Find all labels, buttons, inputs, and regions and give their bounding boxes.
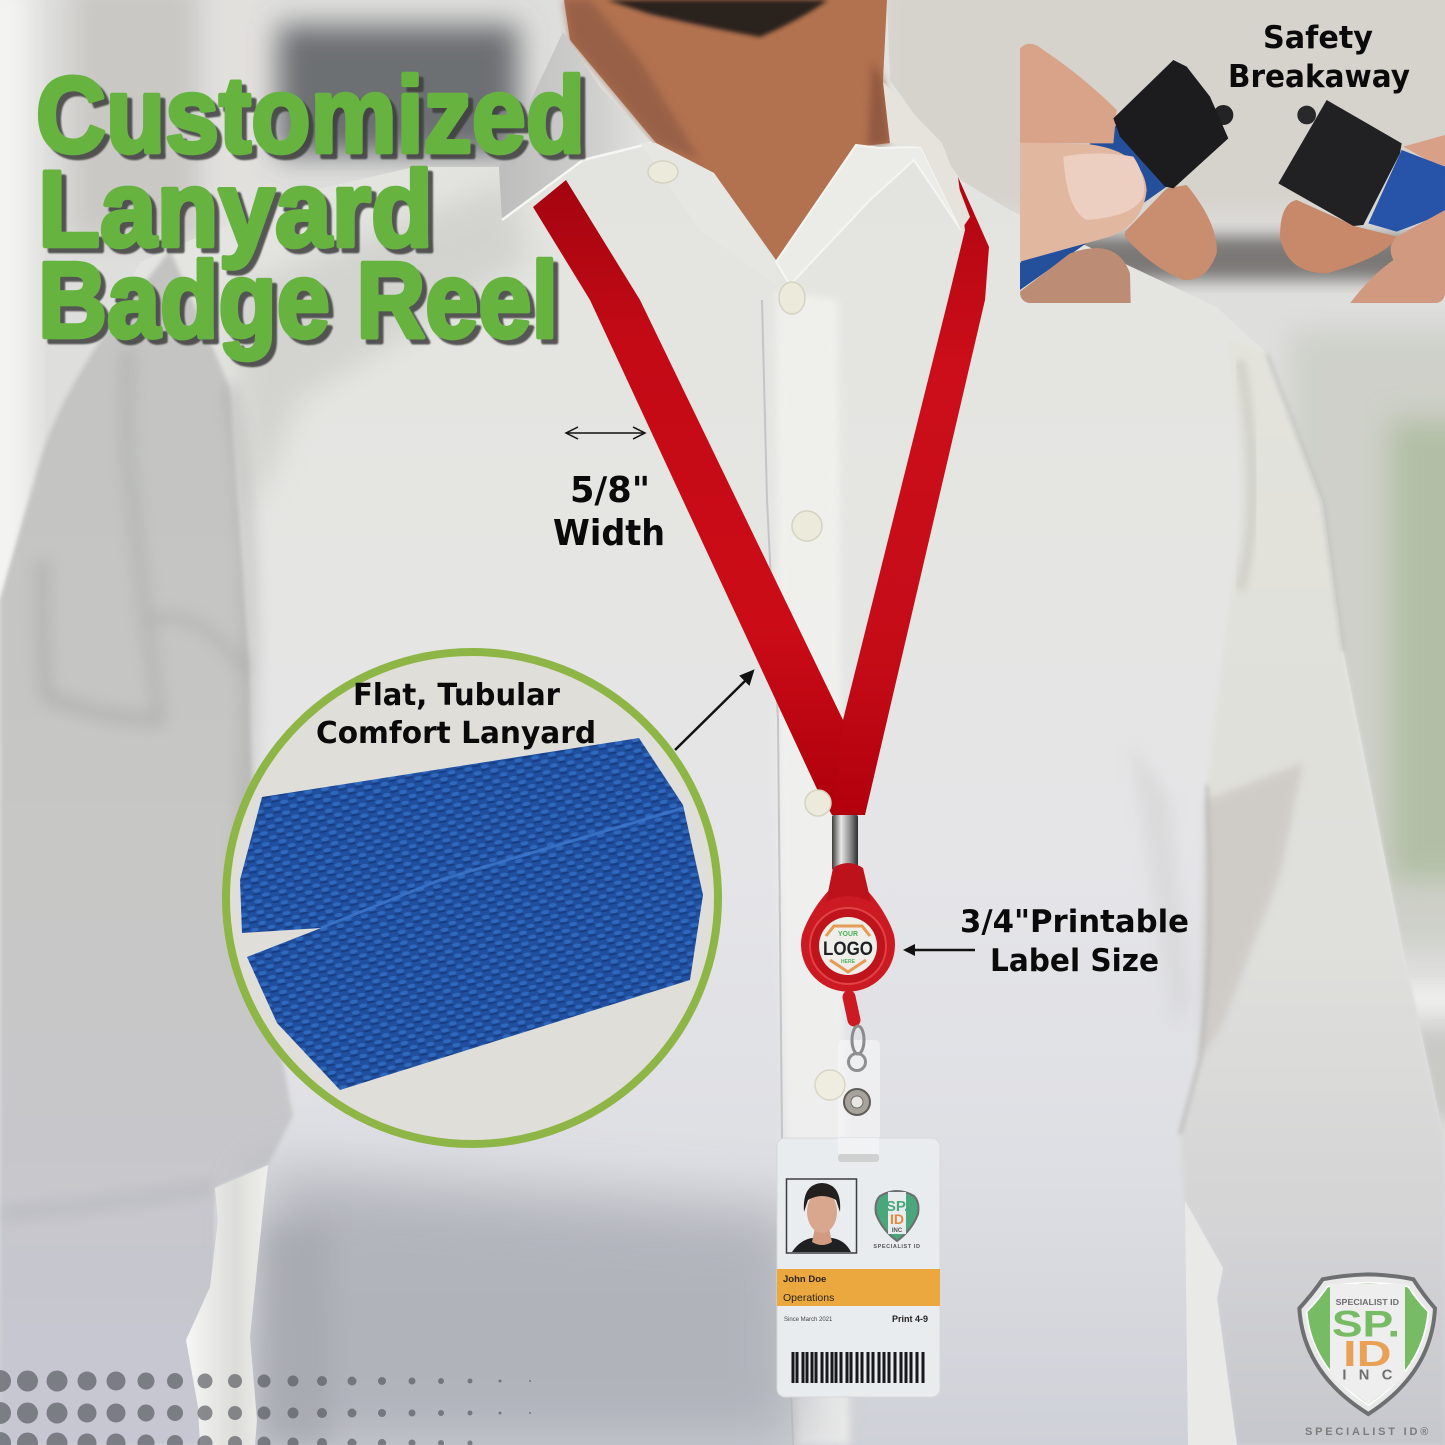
blue fabric <box>240 738 703 1090</box>
printable label size caption: 3/4"Printable <box>960 904 1189 940</box>
placket <box>776 290 850 1445</box>
your logo label: LOGO <box>823 939 873 960</box>
id badge card: Print 4-9 <box>892 1314 928 1324</box>
arrow: circle to lanyard <box>675 671 753 750</box>
printable label size caption <box>960 904 1189 979</box>
your logo label: YOUR <box>838 931 858 938</box>
id badge card: Since March 2021 <box>784 1317 833 1323</box>
printable label size caption: Label Size <box>990 943 1159 979</box>
neck <box>564 0 890 260</box>
metal connector tube <box>832 815 858 870</box>
left arm and body gap <box>186 1165 268 1445</box>
shoulder shade <box>230 180 530 520</box>
safety breakaway label: Breakaway <box>1228 59 1410 95</box>
shirt buttons <box>648 161 831 816</box>
your logo label <box>823 926 873 972</box>
circle label: Flat, Tubular <box>353 678 560 713</box>
width label: Width <box>553 513 665 554</box>
beard <box>607 0 828 37</box>
specialist id shield logo: SPECIALIST ID <box>1336 1297 1399 1307</box>
right hand and breakaway half <box>1278 100 1445 303</box>
card shield logo: SPECIALIST ID <box>873 1244 921 1250</box>
clear strap and clip <box>815 1026 880 1146</box>
card shield logo <box>873 1191 921 1250</box>
portrait photo <box>786 1179 856 1253</box>
lanyard strap <box>533 177 989 815</box>
safety breakaway label <box>1228 20 1410 95</box>
width label: 5/8" <box>570 470 650 511</box>
specialist id shield logo: INC <box>1342 1367 1393 1383</box>
left collar <box>499 32 776 285</box>
barcode <box>793 1352 923 1383</box>
card shield logo: INC <box>892 1228 903 1234</box>
specialist id shield logo: SP. <box>1332 1303 1400 1345</box>
left hand and breakaway half <box>1020 44 1233 303</box>
card shield logo: SP. <box>886 1198 908 1215</box>
width label <box>553 470 665 554</box>
safety breakaway label: Safety <box>1263 20 1373 56</box>
specialist id shield logo: ID <box>1343 1333 1391 1374</box>
right collar <box>776 82 970 285</box>
body lower shade <box>262 1170 800 1445</box>
width dimension arrow <box>566 427 645 439</box>
title: Lanyard <box>38 148 433 269</box>
circle label <box>316 678 596 751</box>
specialist id shield logo: SPECIALIST ID® <box>1305 1426 1428 1438</box>
right arm and body gap <box>1185 1201 1237 1445</box>
arrow: label size <box>903 944 975 956</box>
inset: safety breakaway photo <box>1020 44 1445 303</box>
name band <box>777 1269 940 1306</box>
halftone dot pattern <box>0 1370 531 1445</box>
circle label: Comfort Lanyard <box>316 716 596 751</box>
retractable badge reel <box>801 863 895 1020</box>
id badge card: Operations <box>783 1292 834 1304</box>
id badge card <box>777 1138 940 1397</box>
right armpit shade <box>1200 763 1303 1060</box>
title: Customized <box>36 54 585 175</box>
right sleeve <box>1180 340 1445 1445</box>
title <box>36 54 585 360</box>
card shield logo: ID <box>890 1211 904 1227</box>
specialist id shield logo <box>1299 1274 1435 1438</box>
left sleeve folds <box>0 350 250 1214</box>
panel: fabric magnifier circle <box>226 652 718 1144</box>
left sleeve <box>0 250 293 1445</box>
your logo label: HERE <box>841 959 856 965</box>
title: Badge Reel <box>38 239 558 360</box>
id badge card: John Doe <box>783 1274 826 1285</box>
